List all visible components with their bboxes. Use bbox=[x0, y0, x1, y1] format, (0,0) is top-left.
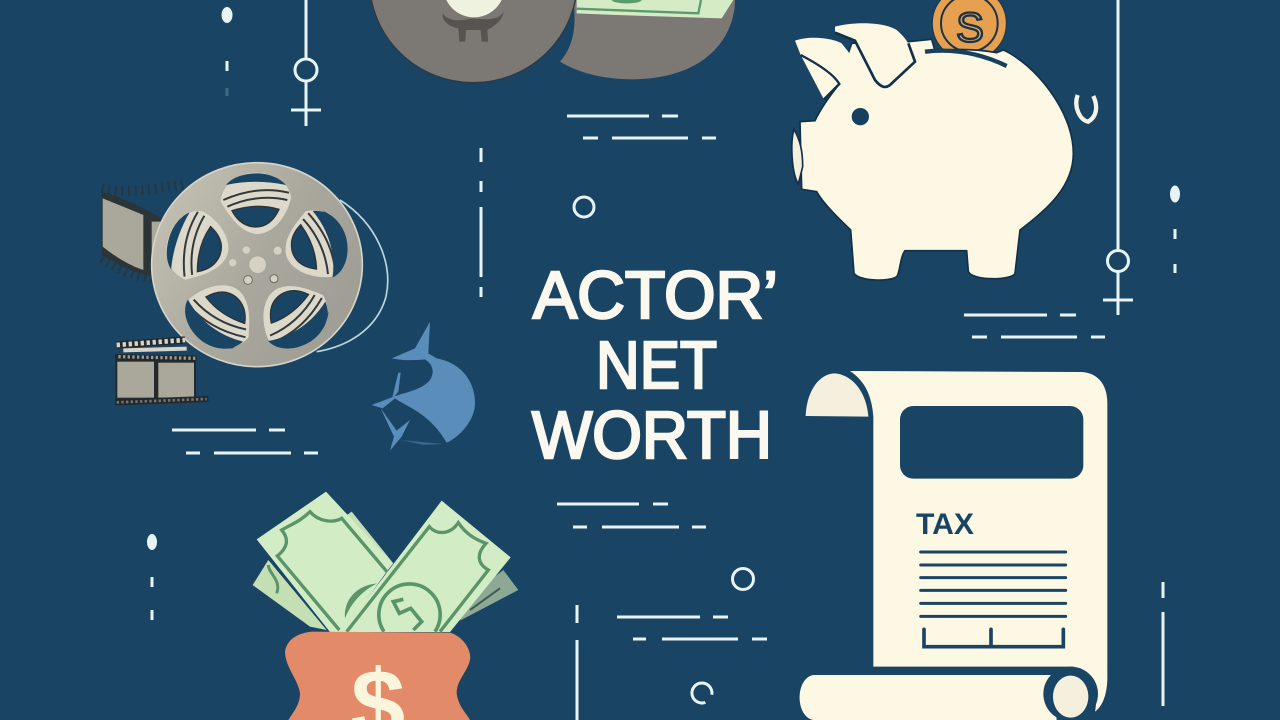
text lines bbox=[921, 552, 1066, 616]
header box bbox=[900, 406, 1083, 479]
small film strip bbox=[115, 340, 208, 402]
film wire bbox=[317, 200, 388, 352]
back bills bbox=[253, 512, 518, 630]
bracket bbox=[924, 629, 1063, 647]
coin: S bbox=[956, 4, 984, 51]
left bill bbox=[257, 492, 393, 632]
title: ACTOR’ bbox=[533, 258, 778, 333]
icon: money bag with bills bbox=[253, 492, 518, 720]
coin slot bbox=[925, 51, 1007, 66]
title bbox=[532, 258, 778, 473]
title: WORTH bbox=[532, 398, 772, 473]
tail bbox=[1076, 95, 1096, 122]
icon: tax document scroll bbox=[800, 371, 1107, 720]
icon: piggy bank bbox=[792, 0, 1096, 280]
icon: blue shark bbox=[372, 322, 475, 451]
tax label: TAX bbox=[916, 508, 974, 541]
pig body bbox=[800, 39, 1073, 280]
scroll sheet bbox=[850, 371, 1107, 712]
reel body bbox=[152, 163, 362, 367]
coin bbox=[932, 0, 1006, 60]
icon: film reel with film strips bbox=[102, 163, 388, 402]
bottom roll bbox=[800, 675, 1057, 720]
scroll top curl bbox=[806, 373, 868, 417]
bag bbox=[285, 632, 470, 720]
roll end bbox=[1043, 667, 1098, 720]
film strip behind reel bbox=[102, 183, 187, 280]
icon: coins and cash disc at top bbox=[369, 0, 735, 83]
eye bbox=[852, 108, 869, 125]
pig right ear bbox=[835, 23, 915, 87]
snout bbox=[792, 129, 803, 184]
pig left ear bbox=[795, 38, 860, 98]
right bill bbox=[342, 501, 511, 632]
title: NET bbox=[596, 328, 717, 403]
